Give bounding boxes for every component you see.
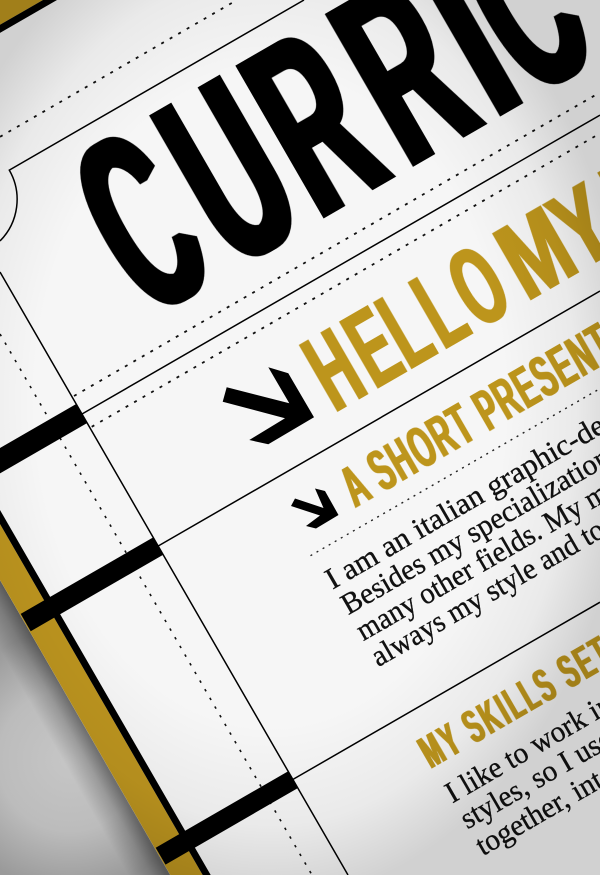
heading: hello my name: M bbox=[477, 183, 595, 323]
dotted vertical rule bbox=[0, 334, 312, 875]
frame with notched corner bbox=[0, 0, 348, 875]
paragraph: skills bbox=[440, 688, 600, 862]
top black band bbox=[0, 0, 57, 33]
title: CURRIC: C bbox=[34, 78, 247, 366]
heading: hello my name: HELLO bbox=[285, 221, 529, 434]
icon: big arrow bbox=[223, 367, 314, 444]
title: CURRIC bbox=[33, 0, 600, 367]
top gold band bbox=[0, 0, 43, 25]
dotted rule under title bbox=[74, 92, 600, 396]
black cross bar 2 bbox=[21, 537, 163, 631]
black cross bar 3 bbox=[156, 771, 298, 865]
title: CURRIC: U bbox=[118, 25, 339, 317]
icon: small arrow bbox=[291, 488, 338, 528]
rule under hello heading bbox=[158, 291, 600, 546]
heading: hello my name bbox=[285, 133, 600, 435]
left black band bbox=[0, 510, 211, 875]
black cross bar 1 bbox=[0, 404, 87, 473]
background bbox=[0, 580, 170, 875]
rule under title bbox=[82, 115, 600, 414]
rule above skills bbox=[293, 602, 600, 779]
paper shadow bbox=[0, 580, 170, 875]
dotted rule under short presentation bbox=[310, 389, 600, 556]
left gold band bbox=[0, 524, 203, 875]
top dotted rule bbox=[0, 0, 237, 137]
paragraph: introduction bbox=[319, 382, 600, 674]
dotted rule above hello heading bbox=[92, 133, 600, 427]
